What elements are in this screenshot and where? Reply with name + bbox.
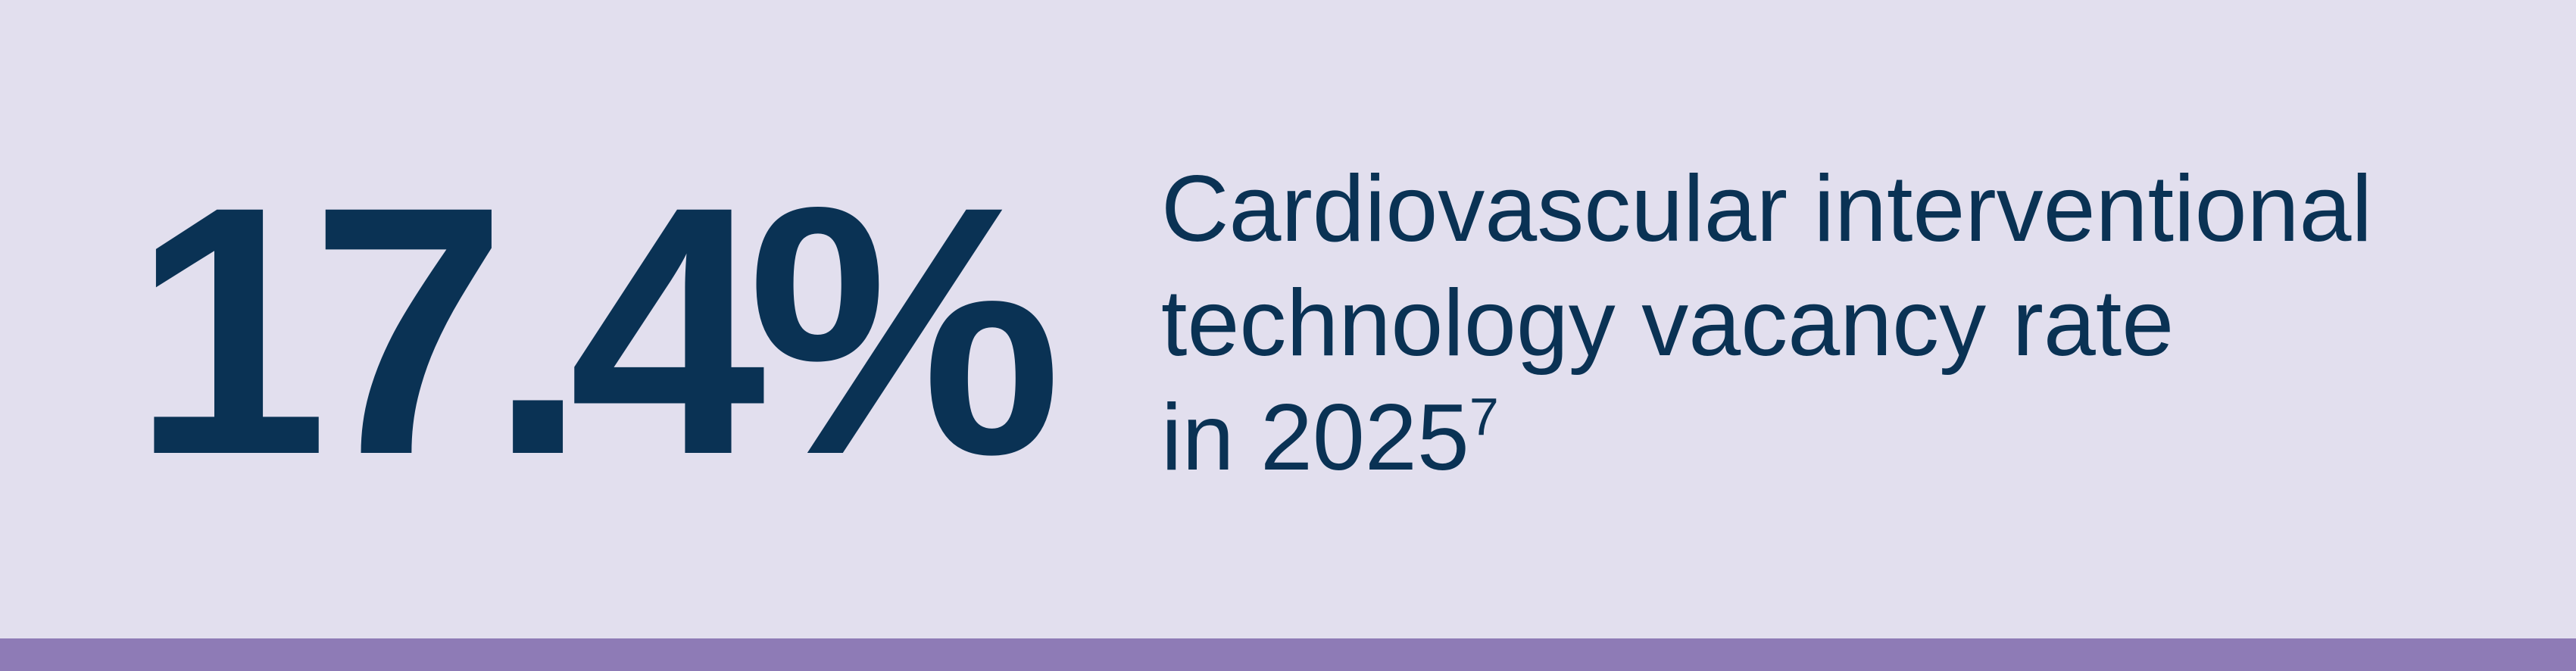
description text — [1161, 157, 2372, 490]
description text: Cardiovascular interventional — [1161, 157, 2372, 261]
big statistic: 17.4% — [132, 133, 1044, 528]
description text: technology vacancy rate — [1161, 271, 2174, 376]
bottom accent bar — [0, 638, 2576, 671]
description text: in 20257 — [1161, 385, 1499, 490]
